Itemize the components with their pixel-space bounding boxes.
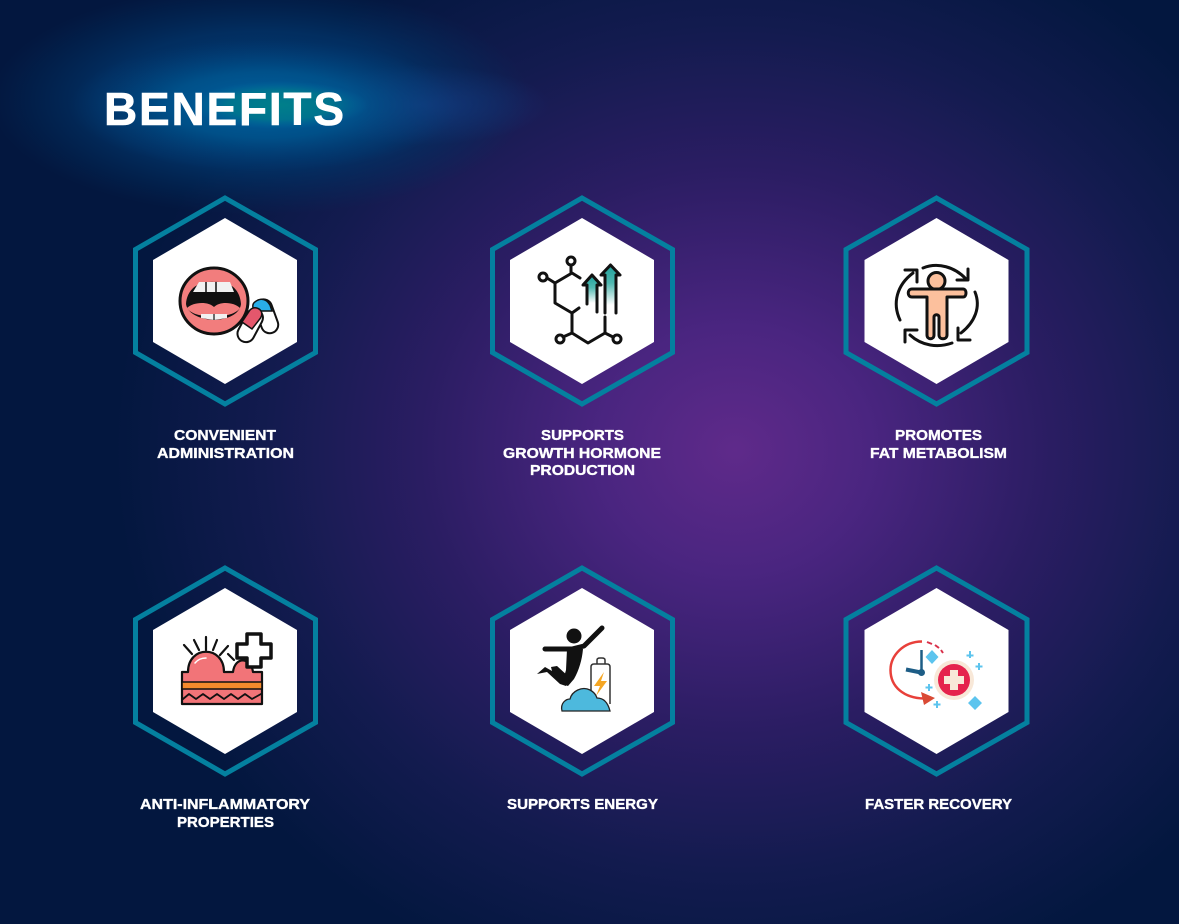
label: [503, 428, 661, 479]
panel: faster recovery: [846, 568, 1027, 813]
label: ADMINISTRATION: [157, 446, 294, 462]
panel: anti-inflammatory: [136, 568, 316, 831]
icon: clock and medical cross: [890, 642, 982, 710]
label: PROMOTES: [895, 428, 982, 444]
icon: mouth and capsules: [180, 268, 281, 345]
label: SUPPORTS: [541, 428, 624, 444]
hexagon badge: [136, 198, 316, 404]
icon: body with cycle arrows: [896, 265, 977, 346]
icon: jumping figure, battery, cloud: [537, 628, 610, 711]
hexagon badge: [492, 198, 672, 404]
hexagon badge: [492, 568, 672, 774]
label: [140, 797, 310, 831]
label: PRODUCTION: [530, 463, 635, 479]
label: FASTER RECOVERY: [865, 797, 1012, 813]
label: SUPPORTS ENERGY: [507, 797, 658, 813]
hexagon badge: [846, 568, 1027, 774]
label: [870, 428, 1007, 462]
panel: fat metabolism: [846, 198, 1027, 462]
panel: energy: [492, 568, 672, 813]
label: GROWTH HORMONE: [503, 446, 661, 462]
title: BENEFITS: [104, 83, 344, 135]
panel: convenient administration: [136, 198, 316, 462]
title glow: [0, 0, 560, 220]
icon: molecule with arrows: [539, 257, 621, 343]
label: CONVENIENT: [174, 428, 276, 444]
hexagon badge: [136, 568, 316, 774]
hexagon badge: [846, 198, 1027, 404]
label: FAT METABOLISM: [870, 446, 1007, 462]
icon: inflamed skin with plus: [182, 634, 271, 704]
label: ANTI-INFLAMMATORY: [140, 797, 310, 813]
panel: growth hormone: [492, 198, 672, 479]
label: [157, 428, 294, 462]
label: PROPERTIES: [177, 815, 274, 831]
